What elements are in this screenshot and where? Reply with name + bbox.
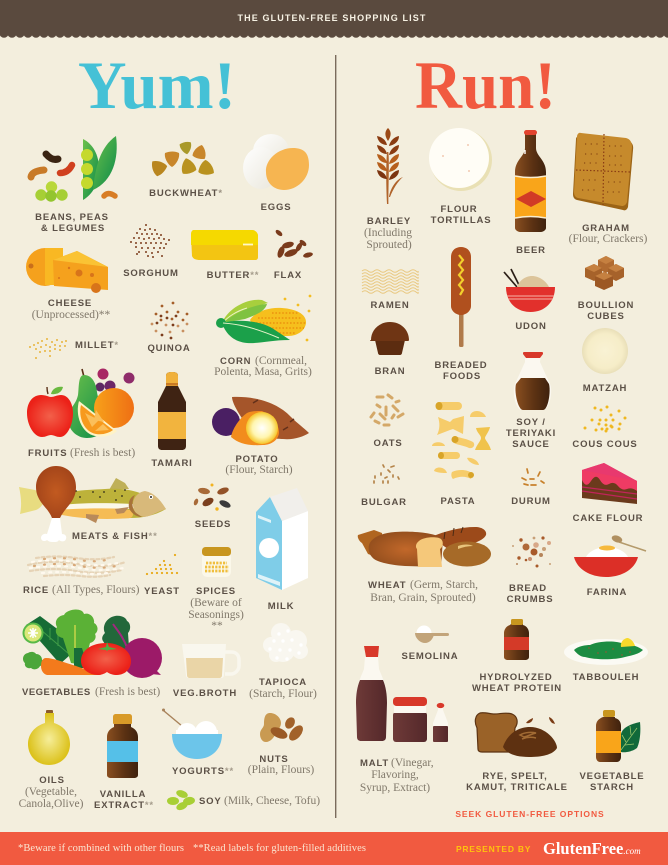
icon: spice jar	[202, 547, 231, 577]
icon: bottle and leaf	[596, 710, 640, 762]
icon: noodle bowl with chopsticks	[504, 269, 555, 312]
item: fruits	[27, 368, 135, 459]
item: bouillon cubes	[578, 256, 634, 322]
item: barley	[364, 128, 412, 251]
icon: plate of tabbouleh	[564, 638, 648, 665]
label: TORTILLAS	[431, 215, 491, 226]
label: BULGAR	[361, 497, 407, 508]
label: MALT	[360, 758, 389, 769]
label: FLAX	[274, 270, 302, 281]
item: buckwheat	[147, 141, 223, 199]
label: MILLET*	[75, 340, 119, 351]
label	[368, 579, 478, 604]
label: SPICES	[196, 586, 236, 597]
item: corn	[214, 296, 312, 378]
label: (Unprocessed)**	[32, 309, 111, 321]
label: VEGETABLE	[579, 771, 645, 782]
item: tamari	[151, 372, 193, 469]
icon: crumbs	[512, 536, 551, 568]
label: RAMEN	[370, 300, 410, 311]
item: yogurts	[162, 708, 234, 777]
icon: cous cous grains	[585, 407, 625, 431]
icon: cucumber, lettuce, carrot, tomato, beet	[22, 610, 162, 678]
item: meats and fish	[19, 466, 166, 542]
label: (Milk, Cheese, Tofu)	[224, 795, 320, 807]
icon: eggs	[243, 134, 309, 190]
label	[19, 775, 84, 810]
label: CORN	[220, 356, 251, 367]
label	[22, 686, 160, 698]
icon: stacked cubes	[585, 256, 624, 290]
item: tapioca	[249, 623, 317, 700]
label: BOULLION	[578, 300, 634, 311]
item: udon	[504, 269, 555, 332]
header band	[0, 0, 668, 38]
icon: flax seeds	[275, 229, 313, 259]
item: pasta	[432, 402, 491, 507]
footer band	[0, 832, 668, 865]
item: rice	[23, 556, 140, 596]
icon: bran muffin	[370, 322, 409, 355]
label: Seasonings)	[188, 609, 244, 621]
item: milk	[256, 488, 308, 612]
label: (Plain, Flours)	[248, 764, 314, 776]
icon: assorted bread loaves	[358, 527, 491, 567]
label: (Cornmeal,	[255, 355, 307, 367]
icon: buckwheat kernels	[147, 141, 218, 179]
icon: graham cracker	[573, 133, 633, 210]
label: Polenta, Masa, Grits)	[214, 366, 312, 378]
icon: mixed seeds	[193, 484, 232, 511]
icon: millet grains	[30, 339, 66, 358]
label: EGGS	[261, 202, 291, 213]
label: (Vinegar,	[391, 757, 434, 769]
item: durum	[511, 469, 551, 507]
icon: tortilla	[429, 128, 492, 191]
label: FARINA	[587, 587, 627, 598]
label: WHEAT	[368, 580, 406, 591]
label: SOY	[199, 796, 222, 807]
label: VANILLA	[100, 789, 146, 800]
item: sorghum	[123, 225, 179, 279]
column divider	[335, 55, 336, 818]
label: Flavoring,	[371, 769, 419, 781]
label: BRAN	[375, 366, 405, 377]
item: hydrolyzed wheat protein	[472, 619, 562, 694]
item: matzah	[582, 328, 628, 394]
label	[248, 754, 314, 776]
item: bran	[370, 322, 409, 377]
item: soy and teriyaki sauce	[506, 352, 556, 450]
item: vegetable starch	[579, 710, 645, 793]
label: Bran, Grain, Sprouted)	[370, 592, 476, 604]
label: COUS COUS	[572, 439, 638, 450]
item: malt	[356, 646, 448, 794]
label: CRUMBS	[507, 594, 553, 605]
label: BEANS, PEAS	[35, 212, 109, 223]
icon: beans and pea pod	[31, 136, 117, 202]
label: KAMUT, TRITICALE	[466, 782, 568, 793]
item: beans, peas and legumes	[31, 136, 117, 234]
icon: tapioca pearls	[263, 623, 308, 662]
label: CHEESE	[48, 298, 92, 309]
label: TABBOULEH	[573, 672, 639, 683]
footnote: flours: *Beware if combined with other flours	[18, 843, 184, 854]
item: bulgar	[361, 465, 407, 508]
label: Canola,Olive)	[19, 798, 84, 810]
icon: rice grains	[28, 556, 126, 577]
icon: trout and drumstick	[19, 466, 166, 542]
label: DURUM	[511, 496, 551, 507]
label	[360, 757, 434, 794]
label: TERIYAKI	[506, 428, 556, 439]
label: BEER	[516, 245, 546, 256]
icon: pear, apple, orange, grapes	[27, 368, 134, 438]
label: VEG.BROTH	[173, 688, 237, 699]
item: vegetable broth	[173, 644, 239, 699]
icon: corn dog	[451, 247, 471, 347]
label	[32, 298, 111, 321]
item: quinoa	[147, 303, 191, 354]
label: CAKE FLOUR	[573, 513, 643, 524]
label: (Germ, Starch,	[410, 579, 478, 591]
item: graham crackers	[569, 133, 648, 245]
label: Sprouted)	[366, 239, 412, 251]
icon: measuring cup	[182, 644, 239, 678]
label: SOY /	[516, 417, 546, 428]
item: spices	[188, 547, 244, 632]
icon: oat flakes	[371, 395, 403, 425]
label: MILK	[268, 601, 294, 612]
label: (All Types, Flours)	[52, 584, 140, 596]
item: tabbouleh	[564, 638, 648, 683]
label	[249, 677, 317, 700]
icon: sorghum grains	[131, 225, 169, 257]
item: eggs	[243, 134, 309, 213]
icon: vanilla bottle	[107, 714, 138, 778]
label: MATZAH	[583, 383, 627, 394]
label: FLOUR	[441, 204, 477, 215]
item: flour tortillas	[429, 128, 492, 226]
label: (Fresh is best)	[70, 447, 135, 459]
icon: measuring scoop	[415, 626, 449, 643]
label	[94, 789, 154, 811]
icon: quinoa grains	[152, 303, 187, 338]
item: cheese	[26, 248, 111, 321]
label: (Beware of	[190, 597, 242, 609]
icon: peanut and almonds	[260, 713, 306, 743]
label: BREADED	[435, 360, 487, 371]
icon: oil flask	[28, 710, 70, 765]
label	[28, 447, 135, 459]
icon: bulgar grains	[374, 465, 399, 483]
label: NUTS	[259, 754, 289, 765]
presented by: PRESENTED BY	[456, 844, 531, 854]
item: butter	[191, 230, 259, 281]
label	[225, 454, 293, 476]
header title: THE GLUTEN-FREE SHOPPING LIST	[238, 13, 426, 23]
icon: tamari bottle	[158, 372, 186, 450]
label: WHEAT PROTEIN	[472, 683, 562, 694]
icon: assorted pasta shapes	[432, 402, 491, 479]
label: SEMOLINA	[402, 651, 458, 662]
callout: seek gluten-free options: SEEK GLUTEN-FREE OPTIONS	[455, 809, 605, 819]
item: vanilla extract	[94, 714, 154, 811]
icon: soy sauce bottle	[514, 352, 551, 410]
item: wheat	[358, 527, 491, 604]
label: HYDROLYZED	[479, 672, 553, 683]
item: farina	[574, 534, 646, 598]
item: ramen	[362, 270, 418, 311]
label: TAPIOCA	[259, 677, 307, 688]
label: (Starch, Flour)	[249, 688, 317, 700]
label: PASTA	[440, 496, 476, 507]
icon: beer bottle	[515, 130, 546, 232]
icon: butter block	[191, 230, 258, 260]
label: **	[211, 620, 223, 632]
icon: yogurt bowl and spoon	[162, 708, 222, 759]
item: breaded foods	[435, 247, 487, 382]
label: (Flour, Crackers)	[569, 233, 648, 245]
label	[364, 216, 412, 251]
label: FRUITS	[28, 448, 67, 459]
icon: slice of layer cake	[582, 463, 637, 504]
item: flax	[274, 229, 313, 281]
label: VEGETABLES	[22, 687, 91, 698]
icon: matzah ball	[582, 328, 628, 374]
item: oils	[19, 710, 84, 810]
label: GRAHAM	[582, 223, 630, 234]
label: & LEGUMES	[41, 223, 105, 234]
label: EXTRACT**	[94, 800, 154, 811]
item: yeast	[144, 555, 180, 597]
icon: malt bottle, jar and small bottle	[356, 646, 448, 742]
icon: dark bread and loaf	[475, 713, 557, 757]
icon: cheese wheel and wedge	[26, 248, 108, 293]
item: beer	[515, 130, 546, 256]
icon: red bowl with spoon	[574, 534, 646, 577]
label: (Flour, Starch)	[225, 464, 293, 476]
label: STARCH	[590, 782, 634, 793]
label: Syrup, Extract)	[360, 782, 430, 794]
heading: Run: Run!	[415, 47, 556, 123]
icon: yeast grains	[147, 555, 177, 574]
label: YOGURTS**	[172, 766, 234, 777]
label: (Including	[364, 227, 412, 239]
item: millet	[30, 339, 119, 358]
label	[569, 223, 648, 245]
label: CUBES	[587, 311, 625, 322]
label: FOODS	[443, 371, 481, 382]
label: TAMARI	[151, 458, 193, 469]
label: RYE, SPELT,	[482, 771, 548, 782]
icon: barley stalk	[377, 128, 403, 204]
item: soy	[167, 789, 320, 812]
label: BARLEY	[367, 216, 411, 227]
label: SEEDS	[195, 519, 231, 530]
item: cake flour	[573, 463, 643, 524]
icon: sweet potatoes	[212, 397, 309, 445]
item: rye, spelt, kamut, triticale	[466, 713, 568, 793]
item: seeds	[193, 484, 232, 530]
logo: GlutenFree.com: GlutenFree.com	[543, 839, 641, 858]
label: QUINOA	[147, 343, 191, 354]
label: BUTTER**	[207, 270, 259, 281]
item: semolina	[402, 626, 458, 662]
label: OILS	[39, 775, 65, 786]
icon: corn cob and husk	[216, 296, 310, 343]
label	[214, 355, 312, 378]
label: BREAD	[509, 583, 547, 594]
icon: bottle with red label	[504, 619, 529, 660]
icon: soy beans	[167, 789, 196, 812]
label: (Vegetable,	[25, 786, 77, 798]
item: vegetables	[22, 610, 162, 698]
label: BUCKWHEAT*	[149, 188, 223, 199]
label: (Fresh is best)	[95, 686, 160, 698]
label: UDON	[515, 321, 547, 332]
label: YEAST	[144, 586, 180, 597]
icon: ramen noodle waves	[362, 270, 418, 293]
label: POTATO	[235, 454, 279, 465]
label: OATS	[373, 438, 403, 449]
item: nuts	[248, 713, 314, 776]
item: potato	[212, 397, 309, 476]
icon: milk carton	[256, 488, 308, 590]
item: bread crumbs	[507, 536, 553, 605]
label: SAUCE	[512, 439, 550, 450]
footnote: additives: **Read labels for gluten-filled additives	[193, 843, 366, 854]
label: MEATS & FISH**	[72, 531, 158, 542]
heading: Yum: Yum!	[78, 47, 236, 123]
item: oats	[371, 395, 403, 449]
label: SORGHUM	[123, 268, 179, 279]
label	[188, 586, 244, 632]
label: RICE	[23, 585, 49, 596]
item: cous cous	[572, 407, 638, 450]
icon: durum grains	[522, 469, 544, 485]
